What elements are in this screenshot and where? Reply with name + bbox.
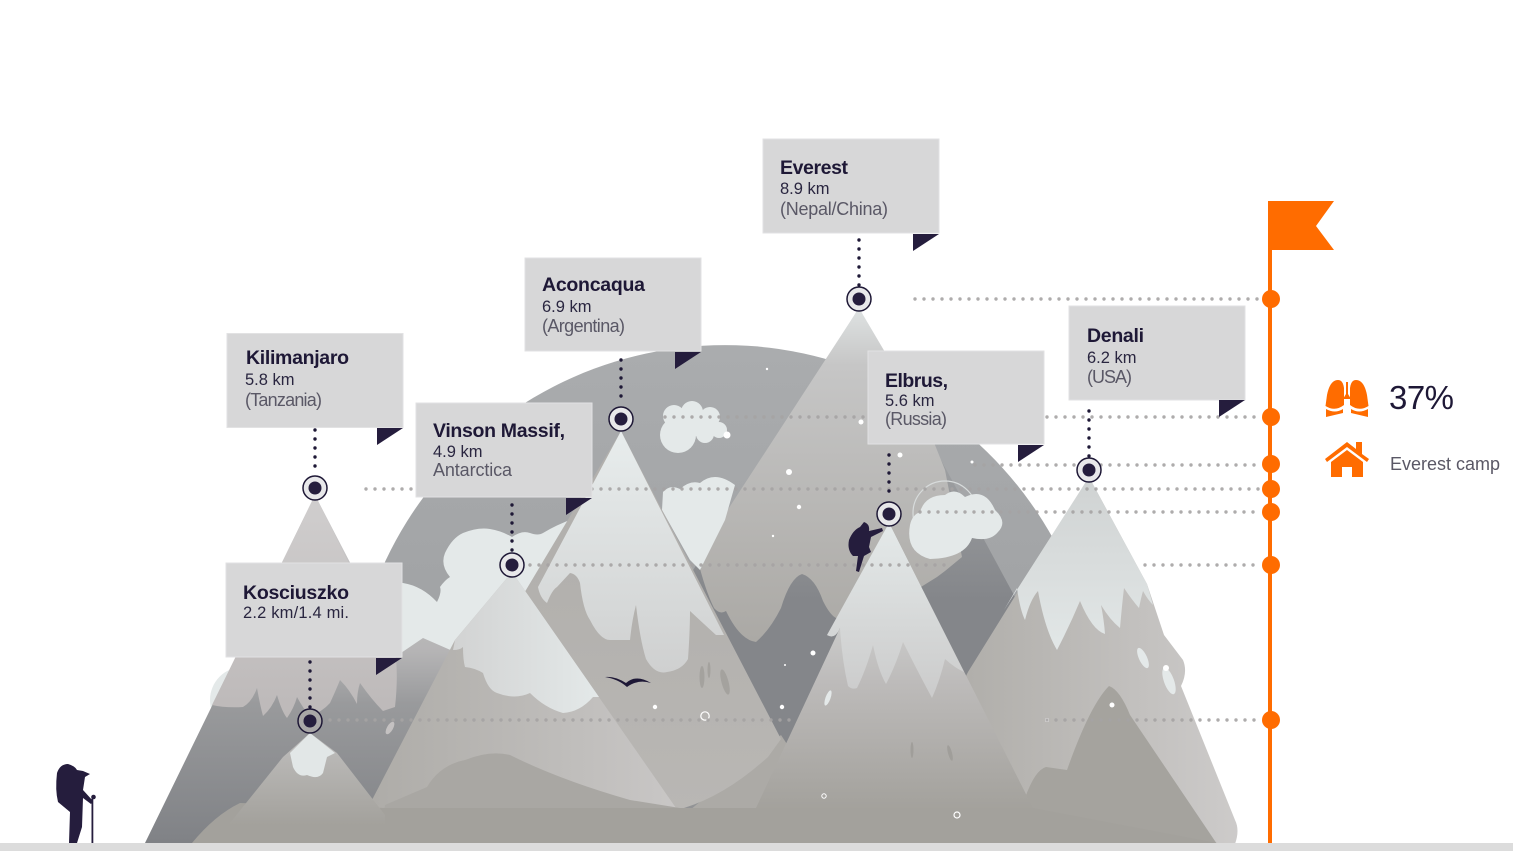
axis markers — [1262, 290, 1280, 729]
cloud: right of Elbrus — [909, 481, 1002, 559]
panel: Aconcagua: 6.9 km — [542, 298, 592, 316]
peak marker: Elbrus — [877, 455, 901, 526]
peak marker: Everest — [847, 240, 871, 311]
icon: house — [1325, 442, 1369, 477]
panel: Denali: Denali — [1087, 325, 1144, 347]
panel: Vinson Massif: Antarctica — [433, 460, 513, 480]
stat: 37%: 37% — [1389, 379, 1454, 416]
scale axis with flag — [1262, 201, 1334, 843]
peak marker: Kosciuszko — [298, 662, 322, 733]
panel: Kosciuszko — [226, 563, 402, 675]
mountain: Aconcagua — [500, 431, 781, 808]
panel: Aconcagua: (Argentina) — [542, 316, 625, 336]
panel: Kilimanjaro: 5.8 km — [245, 371, 295, 389]
panel: Everest: (Nepal/China) — [780, 199, 888, 219]
Aconcagua snow — [538, 431, 724, 672]
panel: Vinson Massif — [416, 403, 592, 515]
cloud: right of Aconcagua — [662, 477, 735, 570]
panel: Denali — [1069, 306, 1245, 417]
foothill: between Aconcagua and Elbrus — [690, 735, 830, 810]
Denali snow — [1004, 477, 1153, 650]
panel: Kilimanjaro: Kilimanjaro — [246, 347, 349, 369]
dotted level lines — [330, 299, 1262, 720]
bird — [605, 677, 651, 687]
peak marker: Denali — [1077, 411, 1101, 482]
background circle — [350, 345, 1100, 843]
mountain: Everest — [690, 308, 1022, 790]
flag — [1268, 201, 1334, 250]
mountain: Denali — [900, 477, 1238, 844]
hiker — [56, 764, 96, 843]
panel: Kosciuszko: 2.2 km/1.4 mi. — [243, 604, 349, 622]
Elbrus snow — [827, 523, 964, 698]
climber — [848, 522, 883, 572]
peak marker: Kilimanjaro — [303, 430, 327, 500]
mountain: Kosciuszko — [215, 733, 386, 843]
panel: Kilimanjaro: (Tanzania) — [245, 390, 322, 410]
panel: Everest: Everest — [780, 157, 848, 179]
panel: Aconcagua: Aconcaqua — [542, 274, 645, 296]
ground bar — [0, 843, 1513, 851]
panel: Everest — [763, 139, 939, 251]
panel: Aconcagua — [525, 258, 701, 369]
Kilimanjaro snow — [212, 495, 397, 718]
panel: Elbrus — [868, 351, 1044, 462]
panel: Vinson Massif: 4.9 km — [433, 443, 483, 461]
panel: Kosciuszko: Kosciuszko — [243, 582, 349, 604]
cloud: sky near Aconcagua — [660, 401, 727, 453]
panel: Elbrus: (Russia) — [885, 409, 947, 429]
panel: Everest: 8.9 km — [780, 180, 830, 198]
icon: lungs — [1326, 380, 1368, 417]
mountain: Vinson Massif — [360, 572, 700, 843]
cloud: behind Vinson and Kosciuszko — [395, 518, 600, 670]
panel: Kilimanjaro — [227, 334, 403, 445]
Denali inner slope — [1000, 686, 1217, 844]
panel: Denali: 6.2 km — [1087, 349, 1137, 367]
panel: Elbrus: Elbrus, — [885, 370, 948, 392]
Vinson inner slope — [380, 753, 680, 843]
cloud: left behind Kilimanjaro — [210, 667, 276, 733]
peak marker: Aconcagua — [609, 360, 633, 431]
mountain: Kilimanjaro — [145, 495, 490, 843]
panel: Elbrus: 5.6 km — [885, 392, 935, 410]
snow dots — [653, 368, 1169, 818]
peak marker: Vinson Massif — [500, 505, 524, 577]
Everest snow — [697, 308, 962, 642]
panel: Vinson Massif: Vinson Massif, — [433, 420, 565, 442]
Kosciuszko snow — [290, 733, 335, 777]
ground band — [192, 803, 1217, 843]
Vinson snow — [453, 572, 599, 713]
mountain: Elbrus — [756, 523, 1033, 808]
panel: Denali: (USA) — [1087, 367, 1132, 387]
label: Everest camp: Everest camp — [1390, 454, 1500, 474]
